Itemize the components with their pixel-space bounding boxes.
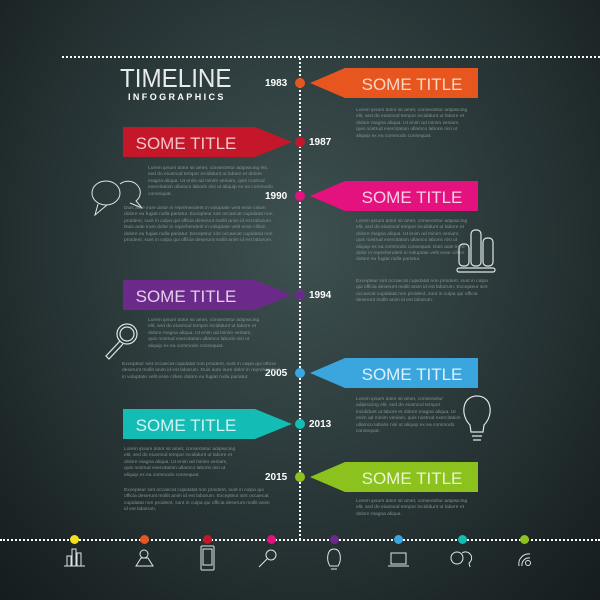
- banner: 2005: [310, 358, 478, 388]
- icon: bar chart: [457, 230, 495, 272]
- banner: 2013: [123, 409, 292, 439]
- text: 1990 continued: Excepteur sint occaecat cupidatat non proident, sunt in culpa qui officia deserunt mollit anim id est laborum. Excepteur sint occaecat cupidatat non proident, sunt in culpa qui officia deserunt mollit anim id est laborum.: [356, 279, 488, 303]
- text: 1983: Lorem ipsum dolor sit amet, consectetur adipisicing elit, sed do eiusmod tempor incididunt ut labore et dolore magna aliqua. Ut enim ad minim veniam, quis nostrud exercitation ullamco laboris nisi ut aliquip ex ea commodo consequat.: [356, 108, 467, 139]
- text: 1987: [309, 137, 331, 148]
- top dotted line: [62, 56, 600, 58]
- banner: 1983: SOME TITLE: [362, 75, 462, 94]
- year markers: [265, 78, 332, 483]
- banner: 2015: SOME TITLE: [362, 469, 462, 488]
- banner: 1994: [123, 280, 292, 310]
- text: 1990: [265, 191, 287, 202]
- banner: 1994: SOME TITLE: [136, 287, 236, 306]
- title: TIMELINE: [120, 63, 232, 93]
- title: INFOGRAPHICS: [128, 92, 226, 102]
- text: 1983: [265, 78, 287, 89]
- text: 1994 continued: Excepteur sint occaecat cupidatat non proident, sunt in culpa qui officia deserunt mollit anim id est laborum. Duis aute irure dolor in reprehenderit in voluptate velit esse cillum dolore eu fugiat nulla pariatur.: [122, 362, 280, 380]
- text: 1990: Lorem ipsum dolor sit amet, consectetur adipisicing elit, sed do eiusmod tempor incididunt ut labore et dolore magna aliqua. Ut enim ad minim veniam, quis nostrud exercitation ullamco laboris nisi ut aliquip ex ea commodo consequat. Duis aute irure dolor in reprehenderit in voluptate velit esse cillum dolore eu fugiat nulla pariatur.: [356, 219, 467, 262]
- icon: light bulb: [464, 396, 490, 440]
- text: 2013: [309, 419, 331, 430]
- icon: speech bubbles: [92, 181, 142, 215]
- banner: 1983: [310, 68, 478, 98]
- text: 2013 continued: Excepteur sint occaecat cupidatat non proident, sunt in culpa qui officia deserunt mollit anim id est laborum. Excepteur sint occaecat cupidatat non proident, sunt in culpa qui officia deserunt mollit anim id est laborum.: [124, 488, 270, 512]
- banner: 2013: SOME TITLE: [136, 416, 236, 435]
- center dotted line: [299, 58, 301, 540]
- banner: 2015: [310, 462, 478, 492]
- banner: 1990: SOME TITLE: [362, 188, 462, 207]
- banner: 2005: SOME TITLE: [362, 365, 462, 384]
- banner: 1987: [123, 127, 292, 157]
- banner: 1990: [310, 181, 478, 211]
- banner: 1987: SOME TITLE: [136, 134, 236, 153]
- text: 1987: Lorem ipsum dolor sit amet, consectetur adipisicing elit, sed do eiusmod tempor incididunt ut labore et dolore magna aliqua. Ut enim ad minim veniam, quis nostrud exercitation ullamco laboris nisi ut aliquip ex ea commodo consequat.: [148, 166, 273, 197]
- text: 2015: [265, 472, 287, 483]
- text: 1994: Lorem ipsum dolor sit amet, consectetur adipisicing elit, sed do eiusmod tempor incididunt ut labore et dolore magna aliqua. Ut enim ad minim veniam, quis nostrud exercitation ullamco laboris nisi ut aliquip ex ea commodo consequat.: [148, 318, 259, 349]
- text: 2005: Lorem ipsum dolor sit amet, consectetur adipisicing elit, sed do eiusmod tempor incididunt ut labore et dolore magna aliqua. Ut enim ad minim veniam, quis nostrud exercitation ullamco laboris nisi ut aliquip ex ea commodo consequat.: [356, 397, 461, 434]
- text: 1987 continued: Duis aute irure dolor in reprehenderit in voluptate velit esse cillum dolore eu fugiat nulla pariatur. Excepteur sint occaecat cupidatat non proident, sunt in culpa qui officia deserunt mollit anim id est laborum. Duis aute irure dolor in reprehenderit in voluptate velit esse cillum dolore eu fugiat nulla pariatur. Excepteur sint occaecat cupidatat non proident, sunt in culpa qui officia deserunt mollit anim id est laborum.: [124, 206, 272, 243]
- icon: magnifier: [106, 324, 137, 359]
- text: 2005: [265, 368, 287, 379]
- text: 2013: Lorem ipsum dolor sit amet, consectetur adipisicing elit, sed do eiusmod tempor incididunt ut labore et dolore magna aliqua. Ut enim ad minim veniam, quis nostrud exercitation ullamco laboris nisi ut aliquip ex ea commodo consequat.: [124, 447, 235, 478]
- bottom dotted line: [0, 539, 600, 541]
- bottom legend dots and icons: [64, 535, 531, 570]
- text: 1994: [309, 290, 331, 301]
- text: 2015: Lorem ipsum dolor sit amet, consectetur adipisicing elit, sed do eiusmod tempor incididunt ut labore et dolore magna aliqua.: [356, 499, 467, 517]
